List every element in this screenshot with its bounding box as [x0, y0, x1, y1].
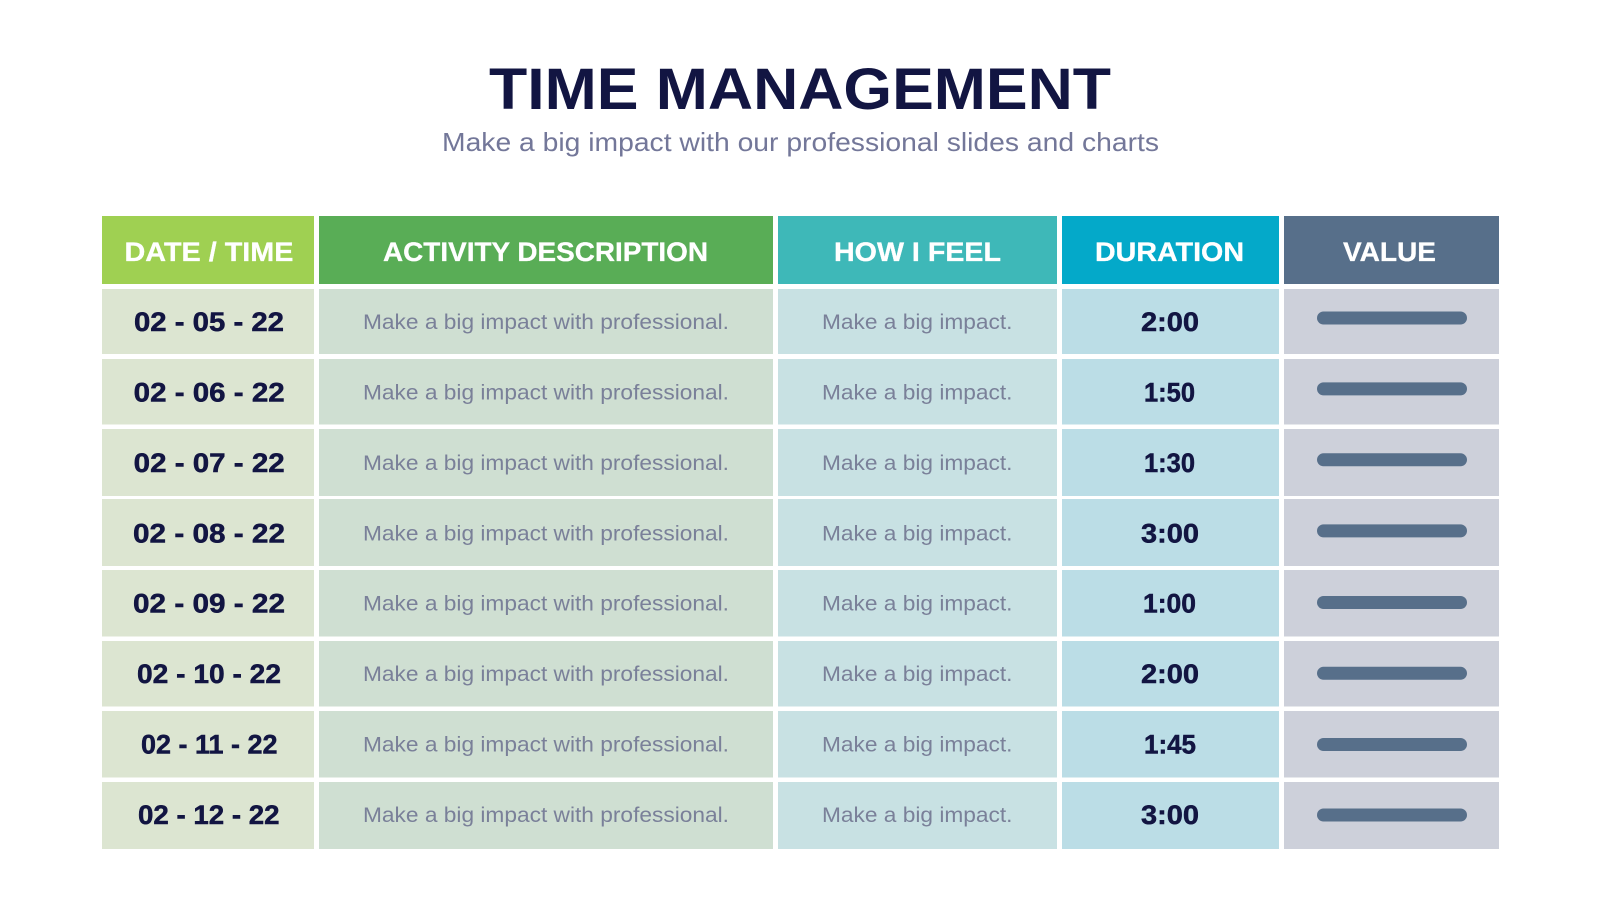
duration cell: 1:30	[1144, 448, 1195, 478]
feeling cell: Make a big impact.	[822, 592, 1012, 616]
duration cell	[1062, 782, 1279, 849]
row 7	[102, 711, 1499, 778]
date cell: 02 - 12 - 22	[138, 800, 280, 830]
activity cell: Make a big impact with professional.	[363, 310, 729, 334]
row 6	[102, 641, 1499, 706]
date cell: 02 - 11 - 22	[141, 730, 278, 760]
feeling cell	[778, 499, 1057, 566]
duration cell: 1:45	[1144, 730, 1196, 760]
activity cell	[319, 499, 773, 566]
row 2	[102, 359, 1499, 424]
duration cell	[1062, 711, 1279, 778]
date cell	[102, 289, 314, 354]
header: date / time: DATE / TIME	[124, 237, 294, 267]
date cell	[102, 782, 314, 849]
date cell: 02 - 05 - 22	[134, 307, 284, 337]
feeling cell	[778, 359, 1057, 424]
activity cell	[319, 711, 773, 778]
duration cell: 2:00	[1141, 307, 1199, 337]
feeling cell	[778, 289, 1057, 354]
activity cell	[319, 289, 773, 354]
date cell: 02 - 08 - 22	[133, 518, 285, 548]
activity cell: Make a big impact with professional.	[363, 733, 729, 757]
value cell with bar	[1284, 570, 1499, 636]
activity cell: Make a big impact with professional.	[363, 521, 729, 545]
feeling cell: Make a big impact.	[822, 733, 1012, 757]
value cell with bar	[1284, 359, 1499, 424]
duration cell	[1062, 641, 1279, 706]
activity cell	[319, 359, 773, 424]
date cell	[102, 570, 314, 636]
value cell with bar	[1284, 499, 1499, 566]
duration cell: 1:50	[1144, 377, 1195, 407]
duration cell	[1062, 429, 1279, 496]
date cell	[102, 711, 314, 778]
feeling cell: Make a big impact.	[822, 451, 1012, 475]
activity cell: Make a big impact with professional.	[363, 803, 729, 827]
header: activity description: ACTIVITY DESCRIPTION	[383, 237, 708, 267]
date cell	[102, 499, 314, 566]
title: TIME MANAGEMENT	[489, 57, 1111, 122]
feeling cell: Make a big impact.	[822, 380, 1012, 404]
table	[102, 216, 1499, 849]
row 8	[102, 782, 1499, 849]
activity cell: Make a big impact with professional.	[363, 380, 729, 404]
duration cell: 1:00	[1143, 589, 1196, 619]
activity cell	[319, 429, 773, 496]
header: duration: DURATION	[1095, 237, 1244, 267]
header: value: VALUE	[1343, 237, 1436, 267]
duration cell	[1062, 359, 1279, 424]
subtitle: Make a big impact with our professional slides and charts	[442, 127, 1159, 157]
value cell with bar	[1284, 711, 1499, 778]
header: activity description	[319, 216, 773, 284]
date cell	[102, 359, 314, 424]
activity cell	[319, 641, 773, 706]
duration cell: 3:00	[1141, 800, 1199, 830]
date cell: 02 - 07 - 22	[134, 448, 285, 478]
feeling cell: Make a big impact.	[822, 662, 1012, 686]
value cell with bar	[1284, 429, 1499, 496]
activity cell	[319, 782, 773, 849]
activity cell: Make a big impact with professional.	[363, 592, 729, 616]
value cell with bar	[1284, 289, 1499, 354]
table header row	[102, 216, 1499, 284]
feeling cell: Make a big impact.	[822, 521, 1012, 545]
header: date / time	[102, 216, 314, 284]
feeling cell	[778, 711, 1057, 778]
duration cell	[1062, 289, 1279, 354]
date cell	[102, 429, 314, 496]
activity cell: Make a big impact with professional.	[363, 451, 729, 475]
activity cell	[319, 570, 773, 636]
row 5	[102, 570, 1499, 636]
header: value	[1284, 216, 1499, 284]
row 4	[102, 499, 1499, 566]
duration cell: 2:00	[1141, 659, 1199, 689]
duration cell	[1062, 499, 1279, 566]
date cell: 02 - 09 - 22	[133, 589, 285, 619]
row 3	[102, 429, 1499, 496]
activity cell: Make a big impact with professional.	[363, 662, 729, 686]
feeling cell: Make a big impact.	[822, 803, 1012, 827]
header: duration	[1062, 216, 1279, 284]
header: how i feel	[778, 216, 1057, 284]
duration cell	[1062, 570, 1279, 636]
row 1	[102, 289, 1499, 354]
value cell with bar	[1284, 782, 1499, 849]
feeling cell	[778, 782, 1057, 849]
feeling cell: Make a big impact.	[822, 310, 1012, 334]
header: how i feel: HOW I FEEL	[834, 237, 1001, 267]
feeling cell	[778, 429, 1057, 496]
date cell: 02 - 06 - 22	[134, 377, 285, 407]
feeling cell	[778, 570, 1057, 636]
value cell with bar	[1284, 641, 1499, 706]
duration cell: 3:00	[1141, 518, 1199, 548]
date cell: 02 - 10 - 22	[137, 659, 281, 689]
feeling cell	[778, 641, 1057, 706]
date cell	[102, 641, 314, 706]
